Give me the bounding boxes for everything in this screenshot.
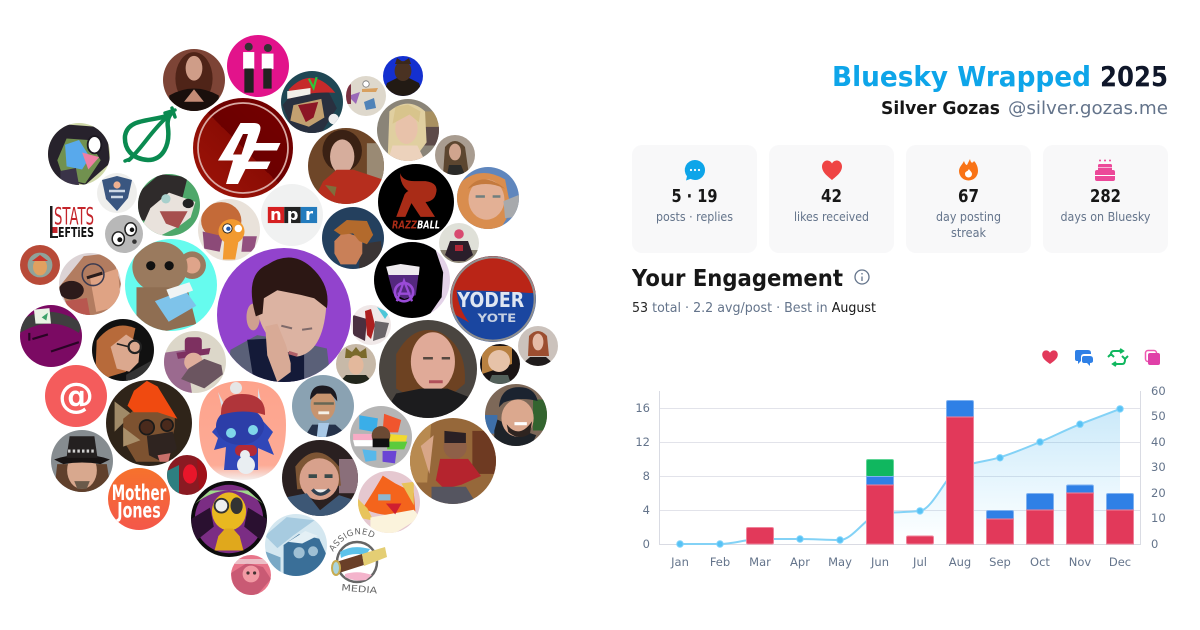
left axis labels: [635, 401, 650, 551]
cumulative area: [680, 409, 1120, 544]
icon: cake: [1095, 160, 1115, 181]
avatar: woman with curly hair: [379, 320, 477, 418]
user name and handle: [881, 98, 1168, 119]
panel: days on Bluesky: days on Bluesky: [1060, 209, 1151, 224]
title: 2025: [1100, 60, 1168, 93]
avatar: multicolor red character: [351, 305, 391, 345]
avatar: red at sign: @: [58, 376, 94, 417]
icon: replies bubbles: [1075, 350, 1093, 366]
left axis labels: 16: [635, 401, 650, 415]
avatar: man in cap: [485, 384, 547, 446]
avatar: orange-haired woman: [457, 167, 519, 229]
month labels: Jun: [870, 555, 889, 569]
month labels: Dec: [1109, 555, 1131, 569]
month labels: Nov: [1069, 555, 1091, 569]
panel: likes received: 42: [821, 186, 842, 207]
panel: likes received: [769, 145, 894, 253]
month labels: [670, 555, 1131, 569]
right axis labels: 60: [1151, 384, 1166, 398]
avatar: red at sign: [45, 365, 107, 427]
icon: likes heart: [1042, 350, 1058, 364]
avatar: cowboy: [51, 430, 113, 492]
avatar: woman in red turtleneck: [308, 128, 384, 204]
chart: engagement by month: [635, 384, 1166, 569]
user name and handle: @silver.gozas.me: [1008, 98, 1168, 119]
axes: [660, 391, 1140, 544]
panel: day posting streak: 67: [958, 186, 979, 207]
avatar: woman with orange eyeshadow: [480, 344, 520, 384]
panel: days on Bluesky: [1043, 145, 1168, 253]
bar: June: [866, 460, 894, 544]
avatar: red-haired woman: [518, 326, 558, 366]
bar: March: [746, 528, 774, 544]
avatar: boy with hand on cheek on purple: [217, 248, 351, 382]
right axis labels: 0: [1151, 537, 1158, 551]
avatar: onion logo: [125, 108, 175, 161]
panel: posts and replies: 5 · 19: [672, 186, 718, 207]
panel: day posting streak: day posting: [936, 209, 1001, 224]
cumulative line: [677, 406, 1123, 547]
month labels: May: [828, 555, 852, 569]
avatar: blue shield: [97, 173, 137, 213]
right axis labels: 20: [1151, 486, 1166, 500]
month labels: Aug: [949, 555, 971, 569]
avatar: mohawk fox: [106, 380, 192, 466]
avatar: Mother Jones logo: [108, 468, 170, 530]
left axis labels: 0: [643, 537, 650, 551]
avatar: Assigned Media spyglass logo: MEDIA: [341, 583, 379, 597]
avatar: bear on blue: [383, 56, 423, 96]
heading: Your Engagement: Your Engagement: [631, 266, 843, 292]
avatar: person with crown: [336, 344, 376, 384]
icon: flame: [959, 159, 978, 180]
right axis labels: 50: [1151, 409, 1166, 423]
avatar: woman in dark red room: [163, 49, 225, 111]
avatar: orange unicorn: [198, 199, 260, 261]
icon: info: [855, 270, 869, 284]
panel: days on Bluesky: 282: [1090, 186, 1121, 207]
avatar: Yoder Vote button: [450, 256, 536, 342]
avatar: woman in denim jacket: [282, 440, 358, 516]
bar: September: [986, 510, 1014, 544]
avatar: Stats for Lefties logo: EFTiES: [58, 225, 94, 241]
avatar: Razzball logo: [378, 164, 454, 240]
avatar: blue sketch character: [265, 514, 327, 576]
right axis labels: 30: [1151, 460, 1166, 474]
avatar: woman in hat with dog: [164, 331, 226, 393]
avatar: man with glasses and tie: [292, 375, 354, 437]
avatar: NPR logo: [261, 184, 323, 246]
right axis labels: 10: [1151, 511, 1166, 525]
avatar: pink small creature: [231, 555, 271, 595]
avatar: mouse with typewriter on cyan: [125, 239, 217, 331]
panel: likes received: likes received: [794, 209, 869, 224]
avatar: husky wolf: [138, 174, 200, 236]
avatar: Stats for Lefties logo: STATS: [54, 202, 94, 230]
icon: speech bubble: [685, 160, 705, 180]
avatar: anarchist mask: [374, 242, 450, 318]
avatar: man with round glasses: [92, 319, 154, 381]
title: Bluesky Wrapped: [832, 60, 1091, 93]
bar: August: [946, 400, 974, 544]
left axis labels: 8: [643, 469, 650, 483]
left axis labels: 4: [643, 503, 650, 517]
avatar: small red blurred: [20, 245, 60, 285]
icon: quotes squares: [1146, 350, 1160, 365]
avatar: motorcycle: [439, 223, 479, 263]
panel: posts and replies: [632, 145, 757, 253]
stacked bars: [746, 400, 1134, 544]
bar: October: [1026, 494, 1054, 544]
avatar: woman with long hair: [435, 135, 475, 175]
month labels: Oct: [1030, 555, 1050, 569]
avatar: deer with glasses: [59, 253, 121, 315]
avatar: Stats for Lefties logo: [50, 202, 94, 241]
month labels: Sep: [989, 555, 1011, 569]
avatar: blonde woman: [377, 99, 439, 161]
month labels: Jan: [670, 555, 689, 569]
avatar: gold gas mask: [191, 481, 267, 557]
avatar: red mask on teal: [167, 455, 207, 495]
avatar: Assigned Media spyglass logo: [330, 528, 387, 597]
bar: July: [906, 536, 934, 544]
avatar: two men on pink: [227, 35, 289, 97]
grid lines: [659, 408, 1140, 510]
bar: November: [1066, 485, 1094, 544]
engagement summary: 53 total · 2.2 avg/post · Best in August: [632, 300, 876, 316]
bar: December: [1106, 494, 1134, 544]
avatar: purple character: [20, 305, 82, 367]
avatar: beige pixel art: [346, 76, 386, 116]
avatar: woman in red dress: [410, 418, 496, 504]
avatar: rainbow octopus: [350, 406, 412, 468]
panel: day posting streak: streak: [951, 225, 987, 240]
avatar: grey googly bird: [105, 215, 143, 253]
avatar: Christmas wolf: [281, 71, 343, 133]
user name and handle: Silver Gozas: [881, 98, 1000, 119]
right axis labels: 40: [1151, 435, 1166, 449]
avatar: red DF logo: [193, 98, 293, 198]
left axis labels: 12: [635, 435, 650, 449]
avatar: man in profile: [322, 207, 384, 269]
month labels: Feb: [710, 555, 730, 569]
avatar: blue cartoon creature: [48, 123, 110, 185]
avatar: blue dragon: [199, 381, 286, 480]
month labels: Jul: [912, 555, 927, 569]
month labels: Mar: [749, 555, 771, 569]
icon: heart: [822, 160, 842, 180]
month labels: Apr: [790, 555, 810, 569]
avatar: Assigned Media spyglass logo: ASSIGNED: [330, 528, 374, 552]
avatar: orange pixel creature: [358, 471, 420, 533]
icon: reposts arrows: [1108, 349, 1128, 366]
panel: avatar cluster: [20, 35, 558, 597]
panel: day posting streak: [906, 145, 1031, 253]
panel: posts and replies: posts · replies: [656, 209, 733, 224]
chart legend: [1042, 349, 1160, 366]
right axis labels: [1151, 384, 1166, 551]
